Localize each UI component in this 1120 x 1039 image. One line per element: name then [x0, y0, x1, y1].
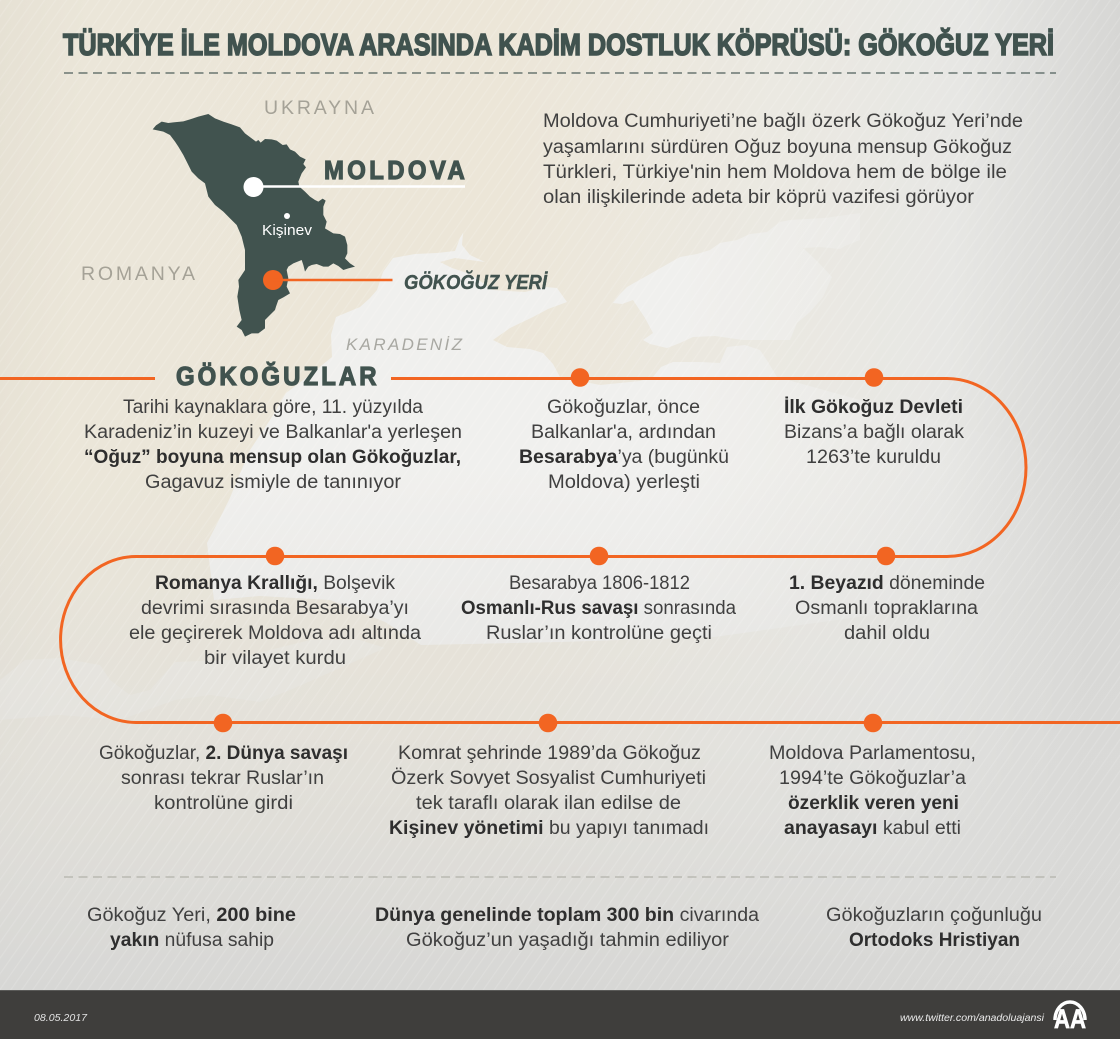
- fact: world total: Gökoğuz’un yaşadığı tahmin ediliyor: [406, 930, 730, 951]
- map labels: KARADENİZ: [346, 335, 463, 354]
- text: origins: Karadeniz’in kuzeyi ve Balkanlar'a yerleşen: [84, 422, 462, 443]
- Kişinev: Kişinev: [262, 223, 313, 239]
- text: first state: [784, 397, 965, 468]
- text: World War 2: sonrası tekrar Ruslar’ın: [121, 768, 324, 789]
- text: Komrat 1989: [389, 743, 709, 839]
- text: origins: Tarihi kaynaklara göre, 11. yüzyılda: [123, 397, 423, 418]
- fact: religion: Gökoğuzların çoğunluğu: [826, 905, 1042, 926]
- text: Romanya: bir vilayet kurdu: [204, 648, 346, 669]
- date: 08.05.2017: [34, 1013, 87, 1024]
- fact: world total: Dünya genelinde toplam 300 bin civarında: [375, 905, 759, 926]
- twitter url: www.twitter.com/anadoluajansi: [900, 1012, 1045, 1024]
- text: Beyazıd: 1. Beyazıd döneminde: [789, 573, 985, 594]
- timeline dots: [214, 368, 895, 732]
- icon: AA logo: AA: [1054, 1004, 1086, 1034]
- intro text: Moldova Cumhuriyeti’ne bağlı özerk Gökoğuz Yeri’nde: [543, 111, 1023, 132]
- Sea of Azov: [613, 213, 860, 348]
- intro text: [543, 111, 1023, 208]
- text: Besarabya settlement: Moldova) yerleşti: [548, 472, 700, 493]
- Gökoğuz Yeri marker: [263, 270, 392, 290]
- Moldova shape: [153, 114, 355, 337]
- fact: religion: [826, 905, 1042, 951]
- Gökoğuz Yeri label: GÖKOĞUZ YERİ: [404, 270, 548, 294]
- map labels: [81, 97, 463, 354]
- Sea of Marmara: [0, 640, 385, 720]
- text: World War 2: kontrolüne girdi: [154, 793, 293, 814]
- text: Besarabya settlement: [519, 397, 729, 493]
- text: Romanya: ele geçirerek Moldova adı altında: [129, 623, 421, 644]
- text: first state: İlk Gökoğuz Devleti: [784, 397, 963, 418]
- footer bar: [0, 990, 1120, 1039]
- text: Beyazıd: Osmanlı topraklarına: [795, 598, 978, 619]
- fact: population: Gökoğuz Yeri, 200 bine: [87, 905, 296, 926]
- Moldova marker: [244, 177, 465, 197]
- text: Osmanlı-Rus: Osmanlı-Rus savaşı sonrasında: [461, 598, 736, 619]
- text: 1994 autonomy: [769, 743, 976, 839]
- title divider: [64, 72, 1056, 74]
- Moldova label: MOLDOVA: [324, 156, 465, 185]
- fact: religion: Ortodoks Hristiyan: [849, 930, 1020, 951]
- intro text: olan ilişkilerinde adeta bir köprü vazifesi görüyor: [543, 187, 975, 208]
- map labels: ROMANYA: [81, 263, 195, 285]
- text: first state: Bizans’a bağlı olarak: [784, 422, 965, 443]
- text: Osmanlı-Rus: Ruslar’ın kontrolüne geçti: [486, 623, 712, 644]
- text: Romanya: Romanya Krallığı, Bolşevik: [155, 573, 396, 594]
- Kişinev: [262, 213, 313, 239]
- map: Moldova: [153, 114, 548, 337]
- text: Osmanlı-Rus: Besarabya 1806-1812: [509, 573, 690, 594]
- text: 1994 autonomy: Moldova Parlamentosu,: [769, 743, 976, 764]
- text: World War 2: Gökoğuzlar, 2. Dünya savaşı: [99, 743, 348, 764]
- Black Sea: [207, 233, 1120, 645]
- text: origins: “Oğuz” boyuna mensup olan Gökoğuzlar,: [84, 447, 461, 468]
- map labels: UKRAYNA: [264, 97, 374, 119]
- text: Besarabya settlement: Besarabya’ya (bugünkü: [519, 447, 729, 468]
- text: 1994 autonomy: 1994’te Gökoğuzlar’a: [779, 768, 966, 789]
- fact: population: [87, 905, 296, 951]
- intro text: yaşamlarını sürdüren Oğuz boyuna mensup Gökoğuz: [543, 137, 1012, 158]
- text: Besarabya settlement: Balkanlar'a, ardından: [531, 422, 716, 443]
- timeline line: [0, 378, 1120, 722]
- text: Osmanlı-Rus: [461, 573, 736, 644]
- text: first state: 1263’te kuruldu: [806, 447, 941, 468]
- text: World War 2: [99, 743, 348, 814]
- text: 1994 autonomy: anayasayı kabul etti: [784, 818, 961, 839]
- text: Komrat 1989: Özerk Sovyet Sosyalist Cumhuriyeti: [391, 768, 706, 789]
- text: Beyazıd: [789, 573, 985, 644]
- text: Romanya: devrimi sırasında Besarabya’yı: [141, 598, 409, 619]
- text: origins: Gagavuz ismiyle de tanınıyor: [145, 472, 402, 493]
- text: Komrat 1989: Kişinev yönetimi bu yapıyı tanımadı: [389, 818, 709, 839]
- text: Komrat 1989: tek taraflı olarak ilan edilse de: [416, 793, 681, 814]
- text: origins: [84, 397, 462, 493]
- text: 1994 autonomy: özerklik veren yeni: [788, 793, 959, 814]
- fact: population: yakın nüfusa sahip: [110, 930, 274, 951]
- text: Besarabya settlement: Gökoğuzlar, önce: [547, 397, 700, 418]
- text: Beyazıd: dahil oldu: [844, 623, 930, 644]
- text: Komrat 1989: Komrat şehrinde 1989’da Gökoğuz: [398, 743, 701, 764]
- heading: Gökoğuzlar: GÖKOĞUZLAR: [176, 361, 377, 391]
- text: Romanya: [129, 573, 421, 669]
- fact: world total: [375, 905, 759, 951]
- intro text: Türkleri, Türkiye'nin hem Moldova hem de bölge ile: [543, 162, 1007, 183]
